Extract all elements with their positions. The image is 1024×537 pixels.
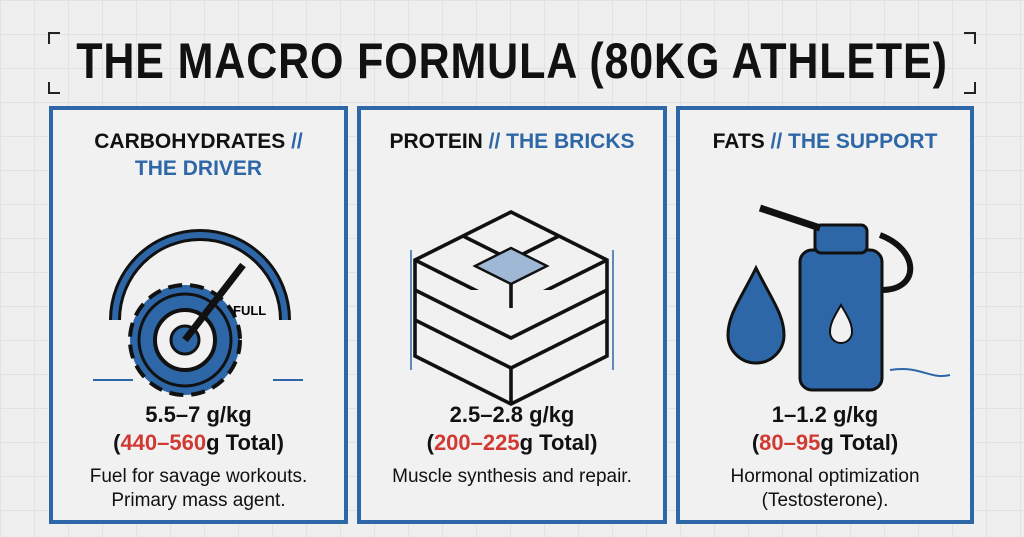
value: 1–1.2 g/kg	[772, 402, 878, 427]
description	[730, 466, 920, 511]
icon: gauge gear: FULL	[233, 303, 266, 318]
description	[90, 466, 307, 511]
description: (Testosterone).	[762, 490, 888, 511]
value	[427, 402, 597, 455]
description: Primary mass agent.	[111, 490, 286, 511]
heading: carbohydrates	[94, 130, 303, 180]
value: (80–95g Total)	[752, 430, 898, 455]
description: Muscle synthesis and repair.	[392, 466, 632, 487]
value	[113, 402, 284, 455]
value: (200–225g Total)	[427, 430, 597, 455]
panel: protein	[357, 106, 667, 524]
title: THE MACRO FORMULA (80KG ATHLETE)	[76, 33, 948, 89]
panel: fats	[676, 106, 974, 524]
value	[752, 402, 898, 455]
icon: bricks	[410, 210, 614, 406]
value: (440–560g Total)	[113, 430, 284, 455]
panel: carbohydrates	[49, 106, 348, 524]
description: Hormonal optimization	[730, 466, 920, 487]
description: Fuel for savage workouts.	[90, 466, 307, 487]
heading: protein: PROTEIN // THE BRICKS	[389, 130, 635, 153]
heading: fats: FATS // THE SUPPORT	[713, 130, 937, 153]
icon: oil can and drop	[726, 204, 950, 392]
icon: gauge gear	[93, 229, 303, 397]
heading: carbohydrates: THE DRIVER	[135, 157, 262, 180]
value: 5.5–7 g/kg	[145, 402, 252, 427]
value: 2.5–2.8 g/kg	[450, 402, 574, 427]
heading: carbohydrates: CARBOHYDRATES //	[94, 130, 303, 153]
